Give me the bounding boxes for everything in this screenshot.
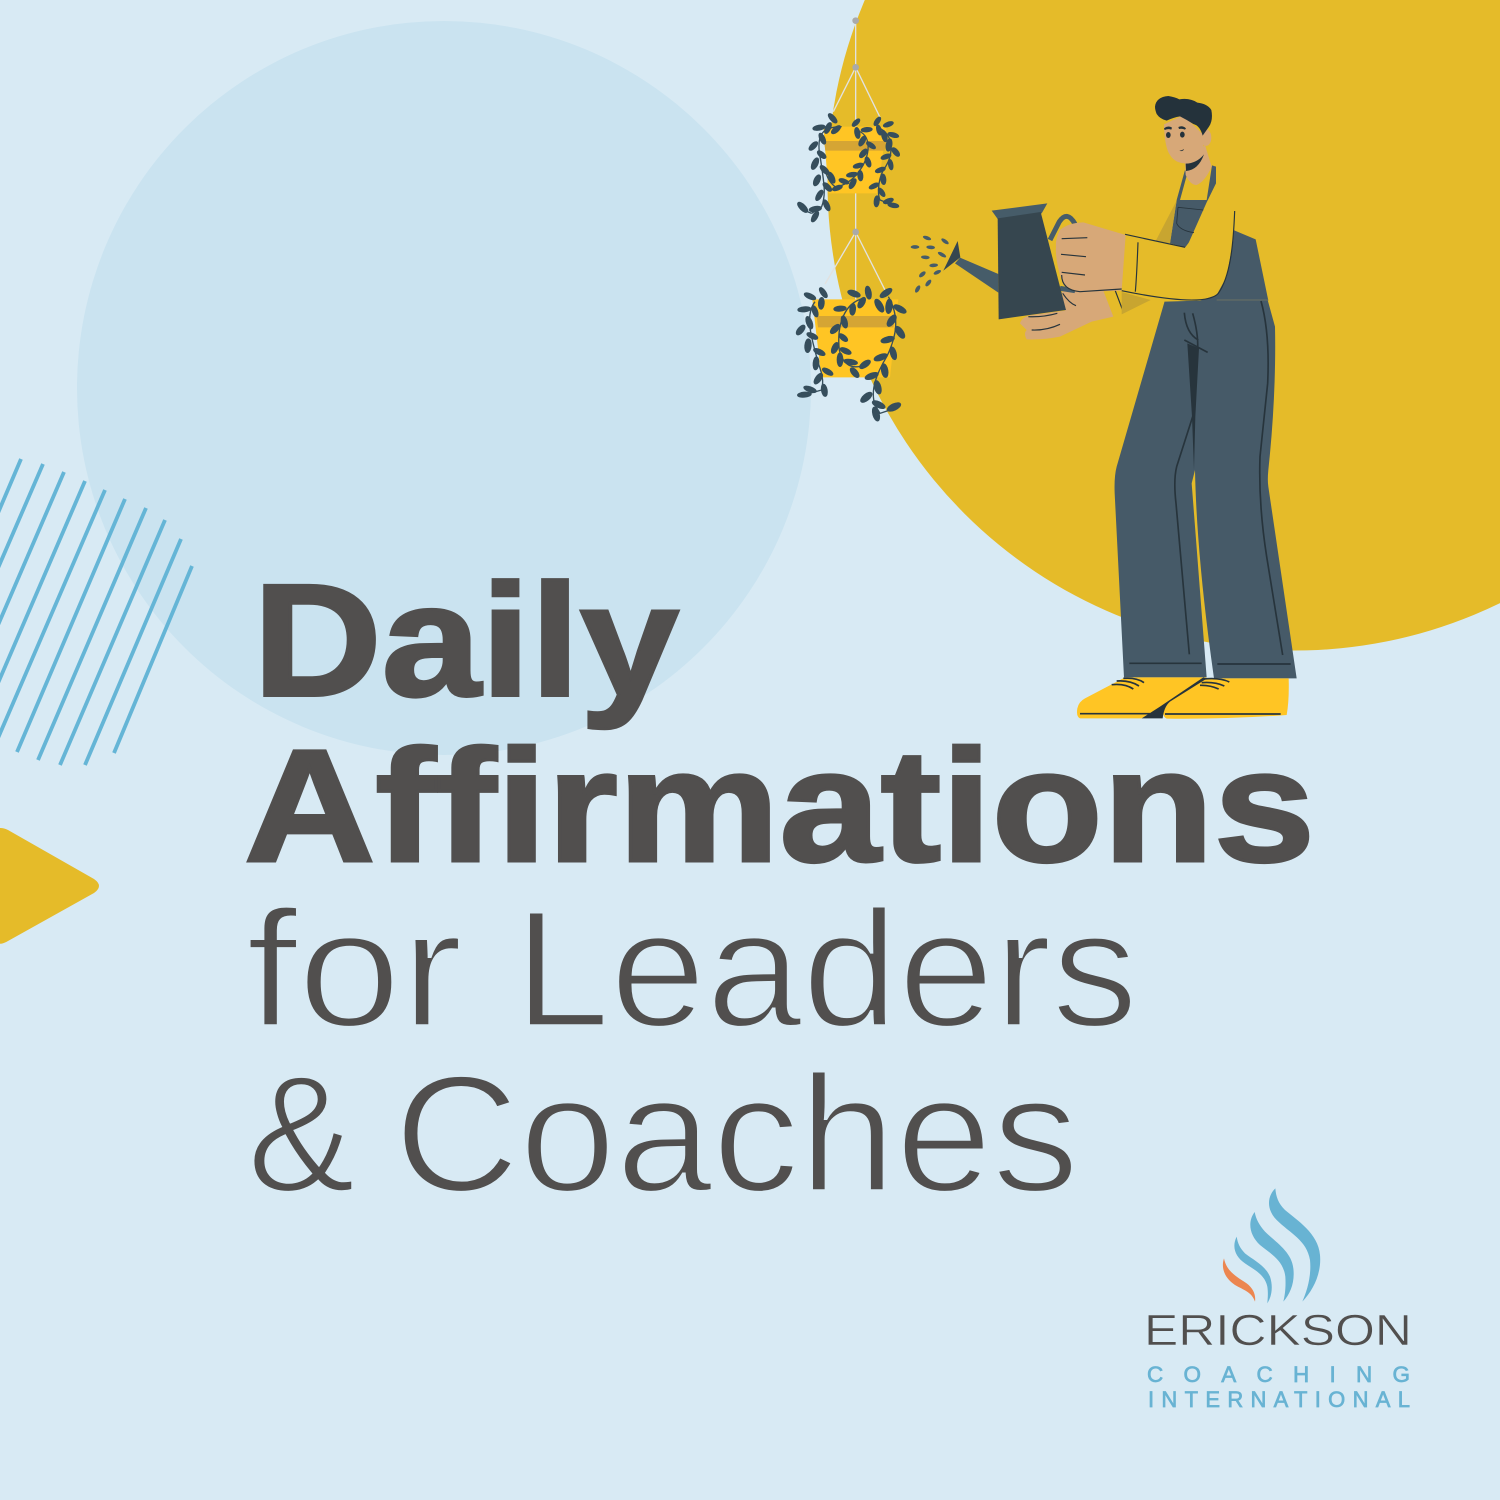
striped circle pattern bbox=[0, 459, 192, 765]
flame icon bbox=[1223, 1188, 1320, 1303]
nozzle bbox=[943, 241, 960, 271]
water drops bbox=[911, 235, 950, 293]
title line: & Coaches: Coaches bbox=[394, 1042, 1079, 1227]
collar shadow bbox=[1186, 154, 1204, 171]
sleeve bbox=[1122, 212, 1235, 302]
shoes bbox=[1077, 677, 1289, 719]
yellow circle bbox=[828, 0, 1500, 650]
logo word: ERICKSON: ERICKSON bbox=[1144, 1306, 1412, 1355]
trouser crease bbox=[1187, 343, 1199, 470]
strings bbox=[825, 21, 885, 300]
eyes, brows, mouth bbox=[1164, 126, 1186, 151]
Erickson Coaching International logo bbox=[1144, 1188, 1412, 1412]
title line: Affirmations: Affirmations bbox=[244, 716, 1315, 895]
spout bbox=[955, 258, 998, 293]
watering can bbox=[943, 203, 1066, 319]
shoe laces and soles bbox=[1080, 678, 1281, 714]
waist seam bbox=[1217, 299, 1268, 301]
yellow triangle bbox=[0, 828, 99, 944]
lower arm shadow bbox=[1122, 292, 1151, 314]
gardener upper body and watering can hand bbox=[1020, 165, 1268, 339]
title line: Daily: Daily bbox=[253, 550, 679, 730]
title line: & Coaches: & bbox=[247, 1042, 356, 1227]
pale blue circle bbox=[77, 21, 811, 755]
torso overalls bbox=[1165, 230, 1268, 301]
can rim bbox=[992, 203, 1047, 219]
lower hand bbox=[1020, 291, 1113, 339]
hair bbox=[1155, 96, 1212, 136]
bib with straps bbox=[1170, 165, 1216, 247]
can body bbox=[998, 212, 1066, 319]
leaves bbox=[795, 113, 907, 422]
gardener legs and overalls bbox=[1115, 300, 1297, 678]
title line: for Leaders bbox=[246, 877, 1138, 1062]
vines bbox=[803, 127, 896, 413]
trouser lines bbox=[1129, 301, 1291, 664]
upper hand bbox=[1056, 222, 1126, 292]
neck bbox=[1185, 145, 1212, 185]
shirt shadow bbox=[1156, 201, 1177, 243]
sleeve outline bbox=[1115, 211, 1235, 309]
title line: for Leaders: for bbox=[246, 877, 463, 1062]
gardener head bbox=[1155, 96, 1212, 185]
hanging plants bbox=[795, 17, 950, 422]
can handle bbox=[1050, 216, 1075, 291]
logo word: COACHING: COACHING bbox=[1147, 1362, 1410, 1387]
lower pot bbox=[812, 299, 898, 377]
face and ear bbox=[1164, 115, 1211, 163]
hook dots bbox=[852, 17, 859, 235]
title line: for Leaders: Leaders bbox=[514, 877, 1138, 1062]
hand lines bbox=[1028, 238, 1122, 330]
logo word: INTERNATIONAL: INTERNATIONAL bbox=[1148, 1387, 1410, 1412]
upper pot bbox=[823, 127, 887, 193]
title bbox=[244, 550, 1315, 1227]
